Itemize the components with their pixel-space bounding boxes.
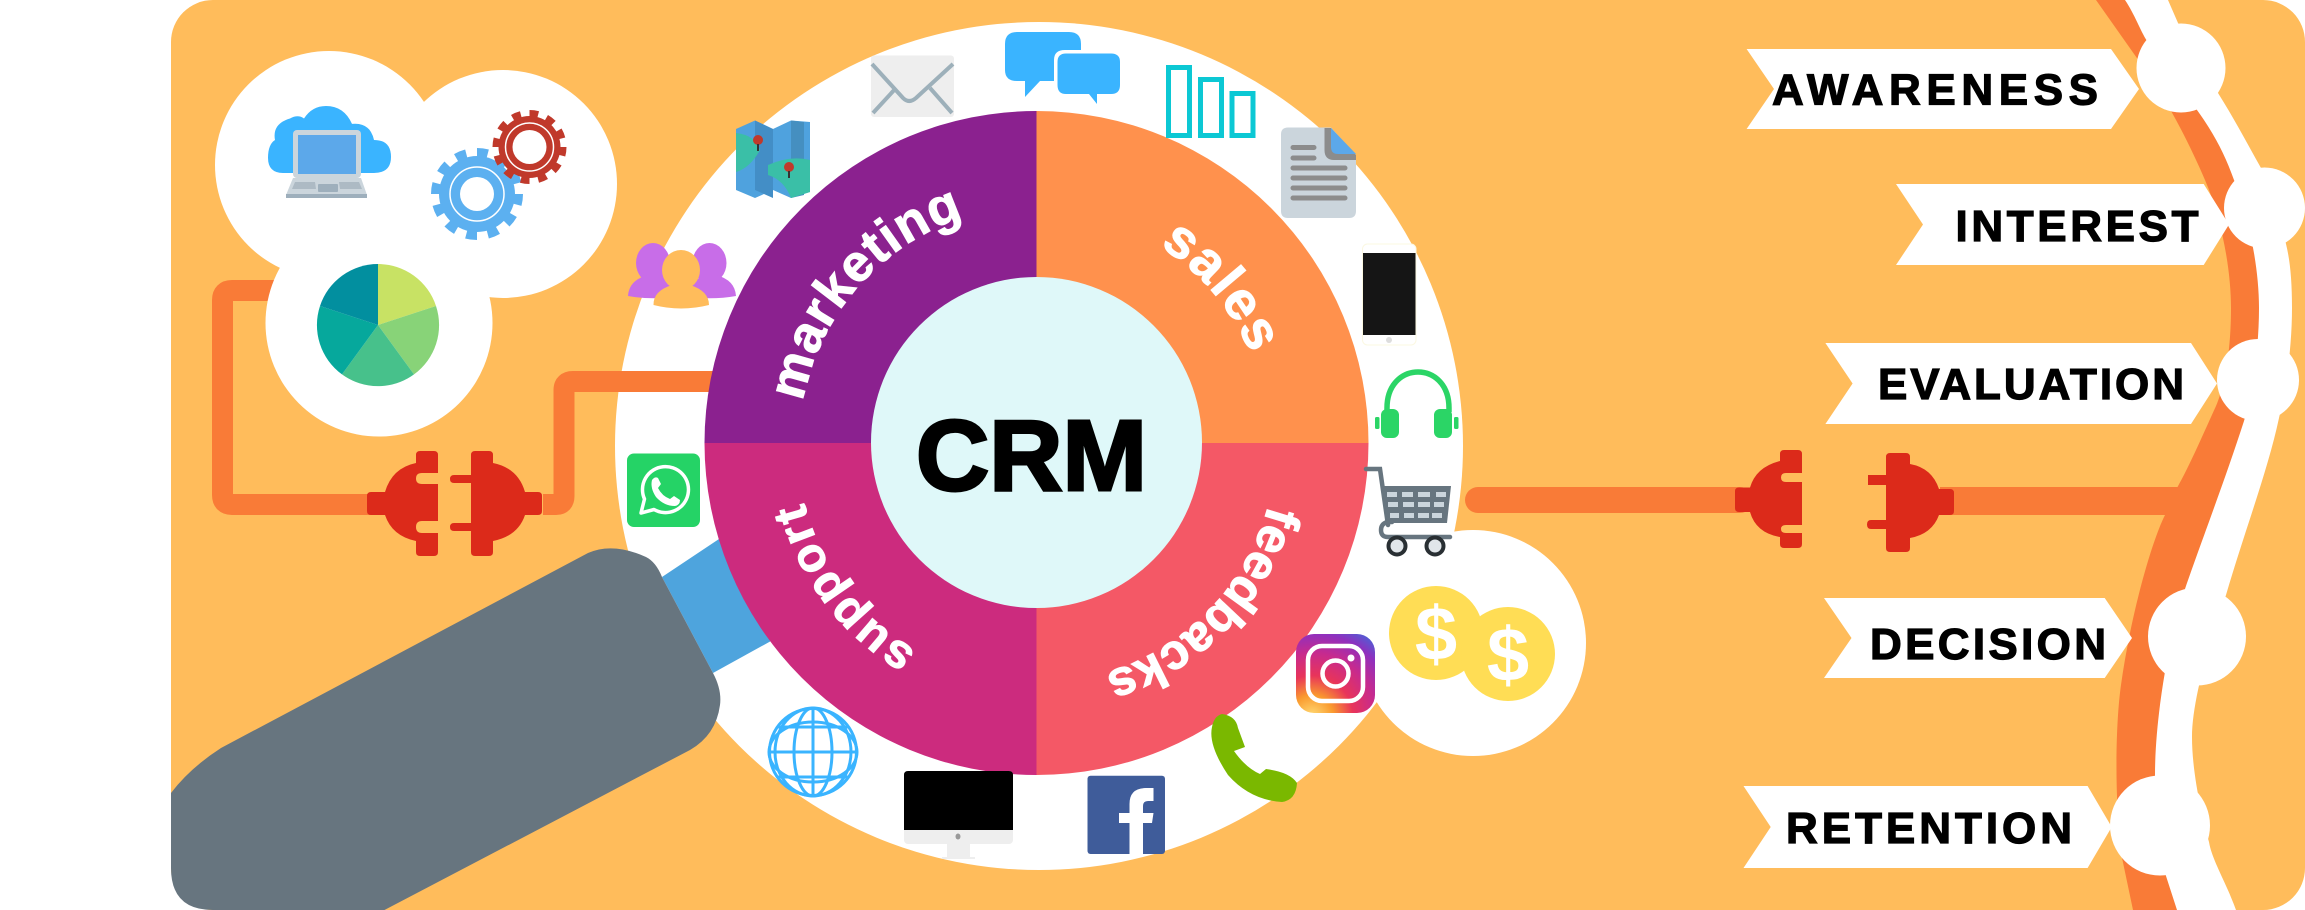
stage node: evaluation — [2217, 339, 2299, 421]
magnifier neck — [662, 525, 800, 673]
icon: desktop computer — [904, 771, 1013, 859]
icon: right plug pair — [1735, 450, 1954, 552]
segment: sales — [1036, 111, 1368, 443]
icon: whatsapp — [627, 454, 700, 527]
stage node: decision — [2148, 588, 2246, 686]
banner: evaluation — [1825, 343, 2217, 424]
tube: cable from CRM to plug — [1478, 487, 1740, 513]
tube: left cable into cloud — [222, 290, 385, 504]
segment: feedbacks — [1036, 443, 1368, 775]
panel: white cluster of tool bubbles — [215, 51, 617, 436]
banner: interest — [1896, 184, 2229, 265]
icon: gold coins: $ — [1487, 613, 1529, 698]
panel: dollar bubble — [1360, 530, 1586, 756]
banner: awareness — [1747, 49, 2139, 129]
label: CRM: CRM — [916, 400, 1147, 512]
icon: pie chart — [317, 264, 439, 386]
tube: cable into donut — [543, 382, 730, 504]
white funnel path — [2125, 0, 2292, 910]
segment: support — [704, 443, 1036, 775]
icon: cloud laptop — [268, 106, 391, 198]
banner: awareness: AWARENESS — [1772, 66, 2098, 114]
icon: left plug pair — [367, 451, 542, 556]
label: support: support — [775, 503, 912, 669]
segment: marketing — [704, 111, 1036, 443]
icon: facebook — [1088, 776, 1165, 854]
banner: decision: DECISION — [1870, 620, 2106, 669]
icon: people group — [628, 243, 736, 308]
chart: CRM donut — [704, 111, 1368, 775]
icon: headphones — [1375, 372, 1458, 438]
icon: telephone handset — [1211, 714, 1297, 802]
icon: shopping cart — [1366, 469, 1451, 554]
centre circle — [871, 277, 1202, 608]
label: sales: sales — [1164, 227, 1274, 350]
icon: smartphone — [1362, 244, 1416, 345]
icon: instagram — [1296, 634, 1375, 713]
stage node: retention — [2110, 776, 2210, 876]
banner: retention: RETENTION — [1786, 804, 2072, 853]
banner: decision — [1824, 598, 2132, 678]
stage node: interest — [2224, 168, 2305, 248]
icon: document — [1281, 128, 1356, 218]
icon: bar chart — [1168, 68, 1253, 136]
icon: gold coins: $ — [1415, 592, 1457, 677]
icon: globe — [769, 708, 857, 796]
stage node: awareness — [2136, 24, 2226, 112]
icon: gold coins — [1389, 586, 1555, 701]
magnifier handle — [171, 548, 720, 910]
banner: evaluation: EVALUATION — [1878, 360, 2184, 409]
icon: map — [736, 120, 810, 198]
icon: envelope — [871, 56, 954, 117]
panel: main white ring — [615, 22, 1463, 870]
tube: cable from plug to funnel — [1940, 487, 2178, 515]
icon: chat bubbles — [1005, 32, 1123, 107]
banner: interest: INTEREST — [1956, 202, 2199, 251]
label: feedbacks: feedbacks — [1108, 509, 1301, 696]
banner: retention — [1744, 786, 2112, 868]
icon: blue and red gears — [436, 114, 562, 235]
label: marketing: marketing — [776, 192, 962, 399]
orange funnel curve — [2096, 0, 2276, 910]
